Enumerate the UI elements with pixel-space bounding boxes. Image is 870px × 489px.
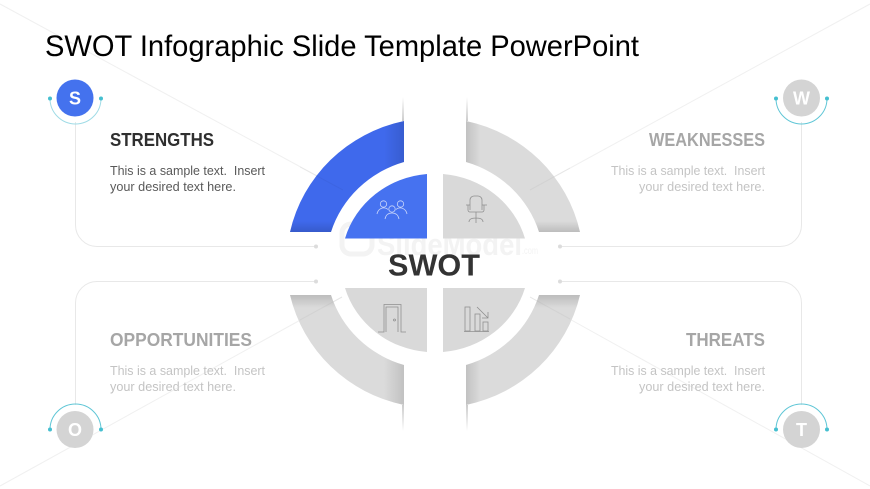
badge: O [48, 404, 103, 448]
panel: threats card outline [560, 282, 802, 405]
panel: opportunities card outline [76, 282, 316, 405]
block: threats text: your desired text here. [639, 380, 765, 394]
block: strengths text: STRENGTHS [110, 130, 214, 150]
block: weaknesses text: WEAKNESSES [649, 130, 765, 150]
panel: weaknesses card outline [560, 122, 802, 246]
badge: W: W [793, 88, 810, 108]
block: strengths text [110, 130, 266, 194]
badge: T [774, 404, 829, 448]
inner sector: strengths [345, 174, 427, 238]
band shadows above and below the outer arcs [402, 97, 468, 431]
center label: SWOT: SWOT [388, 248, 480, 282]
inner sector: weaknesses [443, 174, 525, 238]
block: opportunities text: your desired text here. [110, 380, 236, 394]
inner sector: opportunities [345, 288, 427, 352]
block: threats text: This is a sample text. Insert [611, 364, 766, 378]
outer arc: threats [466, 295, 580, 405]
block: weaknesses text: This is a sample text. Insert [611, 164, 766, 178]
faint diagonal lines over the arcs [300, 167, 570, 320]
badge: T: T [796, 420, 807, 440]
card connector dots [314, 244, 562, 284]
block: weaknesses text [611, 130, 766, 194]
inner sector: threats [443, 288, 525, 352]
icon: people [377, 201, 407, 219]
icon: office chair [466, 196, 487, 223]
title: SWOT Infographic Slide Template PowerPoint [45, 30, 639, 63]
badge: W [774, 80, 829, 124]
badge: O: O [68, 420, 82, 440]
panel: strengths card outline [76, 122, 316, 246]
outer arc: weaknesses [466, 121, 580, 232]
watermark: .com [522, 246, 538, 257]
outer arc: strengths [290, 121, 404, 232]
watermark: SlideModel [377, 227, 522, 262]
block: opportunities text: OPPORTUNITIES [110, 330, 252, 350]
block: opportunities text: This is a sample text. Insert [110, 364, 266, 378]
icon: declining bar chart [464, 307, 489, 332]
badge: S [48, 80, 103, 124]
block: strengths text: This is a sample text. Insert [110, 164, 266, 178]
block: opportunities text [110, 330, 266, 394]
block: threats text [611, 330, 766, 394]
icon: door [378, 304, 406, 332]
badge: S: S [69, 88, 81, 108]
block: weaknesses text: your desired text here. [639, 180, 765, 194]
outer arc: opportunities [290, 295, 404, 405]
block: threats text: THREATS [686, 330, 765, 350]
block: strengths text: your desired text here. [110, 180, 236, 194]
